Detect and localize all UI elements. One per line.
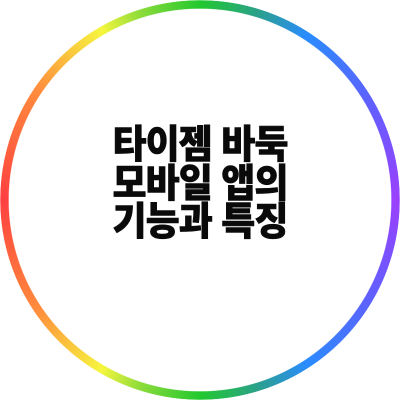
title: 기능과 특징 [112,201,288,244]
title: 모바일 앱의 [112,162,288,206]
title [112,124,288,244]
title: 타이젬 바둑 [112,124,288,167]
